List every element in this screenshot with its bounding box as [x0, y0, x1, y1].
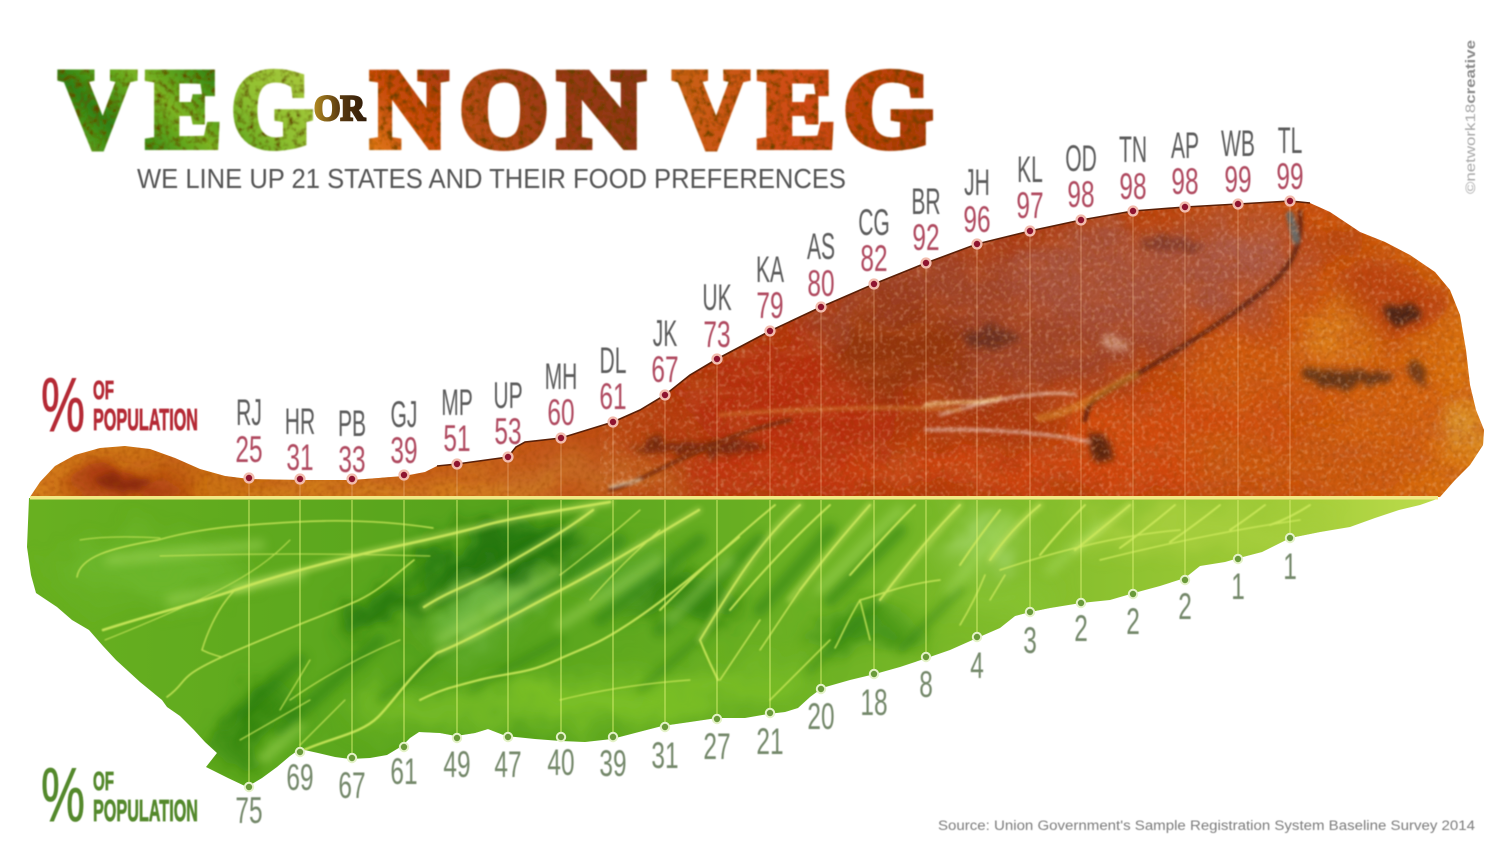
state code labels: TL [1278, 121, 1302, 162]
veg percentage values: 20 [807, 696, 835, 737]
non-veg percentage values: 51 [443, 418, 471, 459]
non-veg percentage values: 39 [390, 430, 418, 471]
leaf veins [77, 502, 1310, 750]
midline divider [30, 496, 1438, 500]
non-veg percentage values: 98 [1171, 161, 1199, 202]
leaf vein glow [235, 502, 1130, 653]
title word: VEG in leaf texture: V [60, 48, 135, 170]
meat top-edge outline [437, 201, 1310, 466]
non-veg percentage values: 79 [756, 285, 784, 326]
legend: veg percent of population: OF [93, 766, 114, 796]
state code labels: HR [285, 402, 315, 443]
title word: NON in meat texture: N [371, 48, 447, 170]
veg percentage values: 4 [970, 645, 984, 686]
legend: veg percent of population: % [41, 752, 85, 838]
veg percentage values: 1 [1231, 566, 1245, 607]
veg data dots [245, 534, 1294, 791]
state code labels: GJ [391, 395, 417, 436]
veg percentage values: 39 [599, 743, 627, 784]
non-veg percentage values: 31 [286, 437, 314, 478]
veg percentage values: 31 [651, 735, 679, 776]
leaf light highlight streaks [110, 510, 1100, 760]
state code labels: WB [1221, 124, 1255, 165]
credit: network18creative: ©network18creative [1463, 39, 1478, 194]
meat texture: light specks [860, 205, 1300, 390]
state code labels [236, 121, 1302, 445]
meat texture: dark specks [20, 190, 1500, 500]
state code labels: OD [1065, 139, 1097, 180]
state code labels: KL [1017, 150, 1043, 191]
non-veg percentage values: 25 [235, 429, 263, 470]
state code labels: RJ [236, 393, 262, 434]
veg percentage values: 1 [1283, 546, 1297, 587]
state code labels: UK [702, 278, 732, 319]
legend: non-veg percent of population: % [41, 362, 85, 448]
state code labels: PB [338, 404, 366, 445]
state code labels: TN [1119, 130, 1147, 171]
legend: veg percent of population: POPULATION [93, 793, 198, 828]
state code labels: AS [807, 227, 835, 268]
title word: VEG in meat texture: G [844, 48, 932, 170]
title word: VEG in meat texture: V [674, 48, 748, 170]
veg percentage values [235, 546, 1297, 831]
title word: NON in meat texture: O [460, 48, 548, 170]
legend: non-veg percent of population: POPULATION [93, 402, 198, 437]
title word: VEG in leaf texture [60, 48, 312, 170]
source note: Source: Union Government's Sample Registration System Baseline Survey 2014 [938, 818, 1476, 833]
veg percentage values: 2 [1126, 601, 1140, 642]
title word: VEG in leaf texture: E [147, 48, 221, 170]
non-veg percentage values: 98 [1119, 166, 1147, 207]
non-veg percentage values: 73 [703, 314, 731, 355]
veg percentage values: 49 [443, 744, 471, 785]
non-veg percentage values: 33 [338, 439, 366, 480]
veg percentage values: 18 [860, 682, 888, 723]
state code labels: MP [441, 383, 473, 424]
legend: veg percent of population [41, 752, 198, 838]
title word: VEG in meat texture [674, 48, 932, 170]
non-veg data dots [245, 197, 1294, 483]
state code labels: JH [964, 163, 990, 204]
non-veg percentage values: 92 [912, 217, 940, 258]
title word: OR: OR [314, 88, 366, 128]
legend: non-veg percent of population: OF [93, 375, 114, 405]
non-veg percentage values: 99 [1224, 159, 1252, 200]
title word: VEG in meat texture: E [759, 48, 835, 170]
leaf dark shading streaks [225, 530, 960, 730]
non-veg percentage values: 80 [807, 263, 835, 304]
veg percentage values: 8 [919, 664, 933, 705]
veg percentage values: 21 [756, 721, 784, 762]
non-veg percentage values: 53 [494, 411, 522, 452]
veg percentage values: 27 [703, 726, 731, 767]
veg percentage values: 3 [1023, 620, 1037, 661]
lettuce leaf: veg area chart [20, 495, 1450, 795]
state code labels: BR [911, 182, 941, 223]
meat drumstick: non-veg area chart [20, 190, 1500, 504]
non-veg percentage values [235, 156, 1304, 480]
non-veg percentage values: 82 [860, 238, 888, 279]
non-veg percentage values: 97 [1016, 185, 1044, 226]
state code labels: CG [858, 203, 890, 244]
veg percentage values: 2 [1178, 586, 1192, 627]
title [60, 48, 932, 170]
title word: VEG in leaf texture: G [232, 48, 312, 170]
title word: NON in meat texture: N [558, 48, 644, 170]
non-veg percentage values: 98 [1067, 174, 1095, 215]
veg percentage values: 75 [235, 790, 263, 831]
title word: NON in meat texture [371, 48, 644, 170]
veg percentage values: 67 [338, 765, 366, 806]
veg percentage values: 47 [494, 744, 522, 785]
non-veg percentage values: 99 [1276, 156, 1304, 197]
state code labels: AP [1171, 126, 1199, 167]
non-veg percentage values: 61 [599, 376, 627, 417]
veg percentage values: 61 [390, 751, 418, 792]
state code labels: JK [653, 314, 677, 355]
subtitle: WE LINE UP 21 STATES AND THEIR FOOD PREFERENCES [137, 163, 846, 194]
pin lines: state connectors [249, 201, 1290, 787]
state code labels: UP [493, 376, 523, 417]
non-veg percentage values: 96 [963, 199, 991, 240]
state code labels: KA [756, 250, 785, 291]
state code labels: DL [600, 341, 626, 382]
meat mottling [20, 190, 1500, 500]
veg percentage values: 69 [286, 757, 314, 798]
state code labels: MH [545, 357, 577, 398]
non-veg percentage values: 60 [547, 392, 575, 433]
non-veg percentage values: 67 [651, 349, 679, 390]
veg percentage values: 2 [1074, 608, 1088, 649]
legend: non-veg percent of population [41, 362, 198, 448]
veg percentage values: 40 [547, 742, 575, 783]
